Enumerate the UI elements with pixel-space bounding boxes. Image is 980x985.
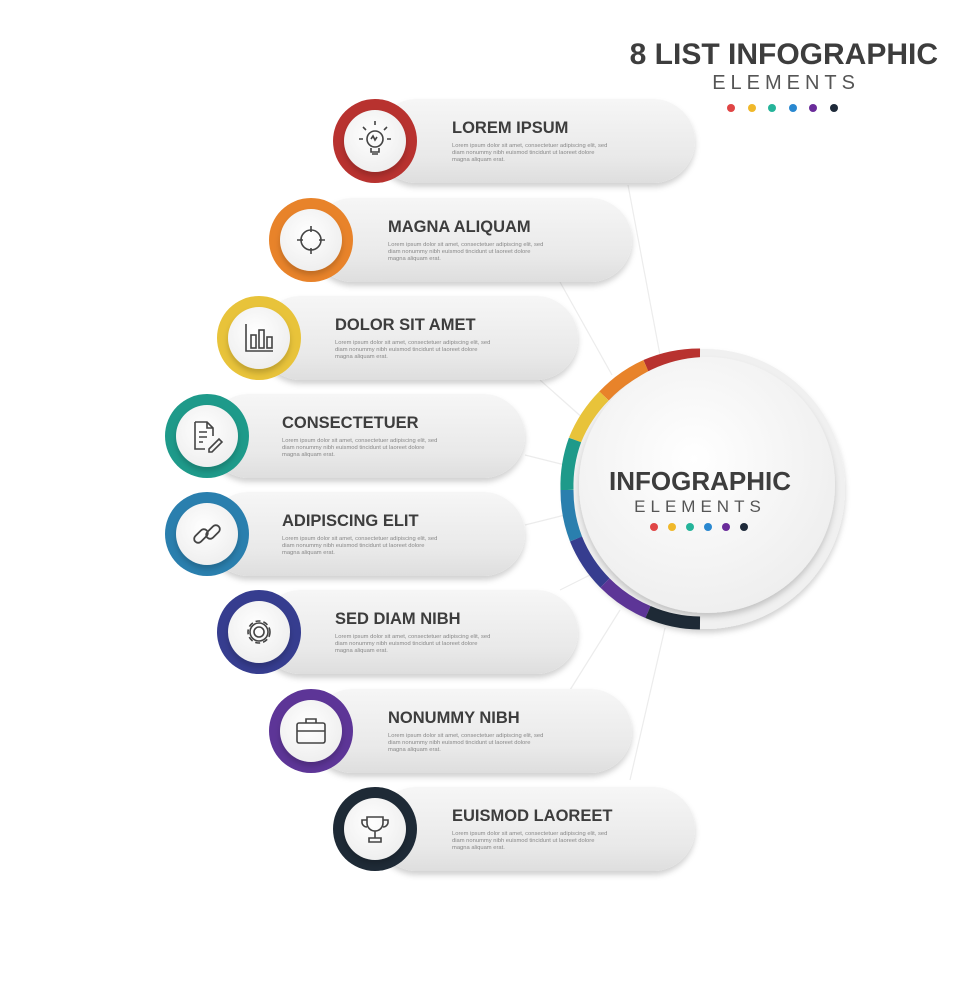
item 7: nonummy nibh (269, 689, 632, 773)
item 6: sed diam nibh (217, 590, 578, 674)
item 1: lorem ipsum: LOREM IPSUM (452, 119, 568, 137)
item 6: sed diam nibh: magna aliquam erat. (335, 648, 388, 654)
item 3: dolor sit amet: DOLOR SIT AMET (335, 316, 476, 334)
item 5: adipiscing elit (165, 492, 525, 576)
central circle: ELEMENTS (634, 497, 766, 516)
item 4: consectetuer: diam nonummy nibh euismod tincidunt ut laoreet dolore (282, 445, 424, 451)
item 8: euismod laoreet (333, 787, 695, 871)
item 1: lorem ipsum: Lorem ipsum dolor sit amet, consectetuer adipiscing elit, sed (452, 143, 607, 149)
item 5: adipiscing elit: magna aliquam erat. (282, 550, 335, 556)
item 4: consectetuer (165, 394, 525, 478)
item 3: dolor sit amet: magna aliquam erat. (335, 354, 388, 360)
item 5: adipiscing elit: Lorem ipsum dolor sit amet, consectetuer adipiscing elit, sed (282, 536, 437, 542)
item 1: lorem ipsum: magna aliquam erat. (452, 157, 505, 163)
item 8: euismod laoreet: diam nonummy nibh euismod tincidunt ut laoreet dolore (452, 838, 594, 844)
item 4: consectetuer: CONSECTETUER (282, 414, 419, 432)
item 7: nonummy nibh: Lorem ipsum dolor sit amet, consectetuer adipiscing elit, sed (388, 733, 543, 739)
header title (630, 38, 938, 112)
item 4: consectetuer: Lorem ipsum dolor sit amet, consectetuer adipiscing elit, sed (282, 438, 437, 444)
item 2: magna aliquam: MAGNA ALIQUAM (388, 218, 531, 236)
item 8: euismod laoreet: Lorem ipsum dolor sit amet, consectetuer adipiscing elit, sed (452, 831, 607, 837)
item 5: adipiscing elit: ADIPISCING ELIT (282, 512, 419, 530)
item 7: nonummy nibh: diam nonummy nibh euismod tincidunt ut laoreet dolore (388, 740, 530, 746)
central circle: INFOGRAPHIC (609, 466, 791, 496)
item 8: euismod laoreet: EUISMOD LAOREET (452, 807, 612, 825)
item 2: magna aliquam: Lorem ipsum dolor sit amet, consectetuer adipiscing elit, sed (388, 242, 543, 248)
item 5: adipiscing elit: diam nonummy nibh euismod tincidunt ut laoreet dolore (282, 543, 424, 549)
item 6: sed diam nibh: Lorem ipsum dolor sit amet, consectetuer adipiscing elit, sed (335, 634, 490, 640)
item 1: lorem ipsum (333, 99, 695, 183)
item 3: dolor sit amet: Lorem ipsum dolor sit amet, consectetuer adipiscing elit, sed (335, 340, 490, 346)
item 7: nonummy nibh: NONUMMY NIBH (388, 709, 520, 727)
item 2: magna aliquam (269, 198, 632, 282)
item 8: euismod laoreet: magna aliquam erat. (452, 845, 505, 851)
item 7: nonummy nibh: magna aliquam erat. (388, 747, 441, 753)
item 2: magna aliquam: magna aliquam erat. (388, 256, 441, 262)
item 1: lorem ipsum: diam nonummy nibh euismod tincidunt ut laoreet dolore (452, 150, 594, 156)
header title: 8 LIST INFOGRAPHIC (630, 38, 938, 71)
item 3: dolor sit amet: diam nonummy nibh euismod tincidunt ut laoreet dolore (335, 347, 477, 353)
central circle (565, 349, 845, 629)
item 2: magna aliquam: diam nonummy nibh euismod tincidunt ut laoreet dolore (388, 249, 530, 255)
item 4: consectetuer: magna aliquam erat. (282, 452, 335, 458)
item 3: dolor sit amet (217, 296, 578, 380)
header title: ELEMENTS (712, 72, 860, 94)
connector lines (525, 185, 665, 780)
item 6: sed diam nibh: diam nonummy nibh euismod tincidunt ut laoreet dolore (335, 641, 477, 647)
item 6: sed diam nibh: SED DIAM NIBH (335, 610, 461, 628)
